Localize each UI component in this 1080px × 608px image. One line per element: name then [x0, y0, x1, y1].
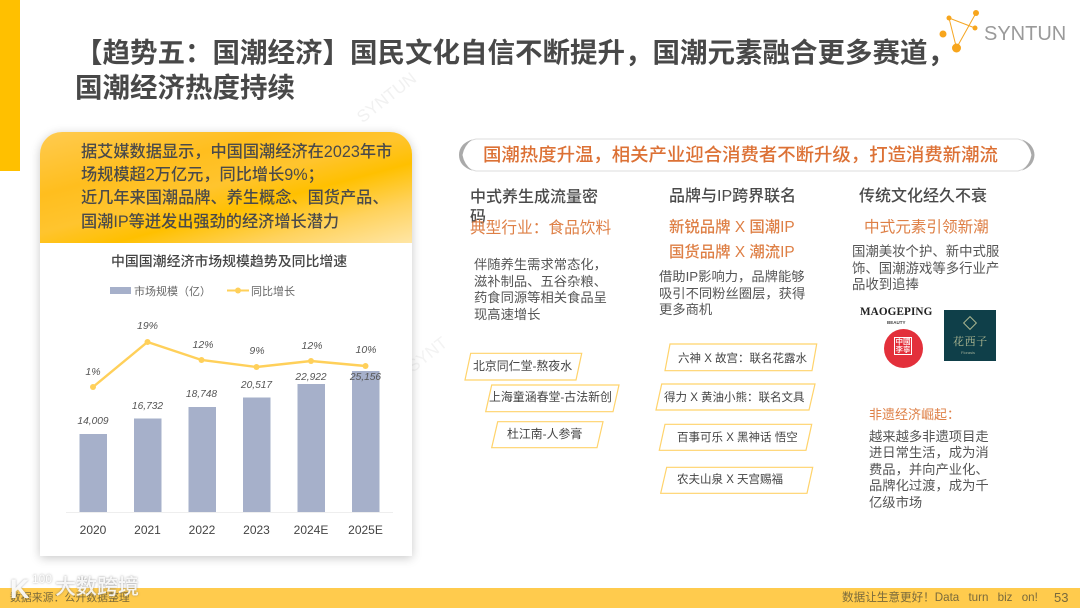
body text: 品牌化过渡，成为千 [869, 478, 989, 493]
brand logo: China Li-Ning [884, 329, 923, 368]
body text: 费品，并向产业化、 [869, 462, 989, 477]
heading: 码 [470, 209, 486, 226]
footer bar [0, 588, 1080, 608]
body text [659, 269, 805, 317]
axis labels [80, 523, 383, 537]
summary text: 近几年来国潮品牌、养生概念、国货产品、 [81, 189, 389, 207]
tag [659, 424, 812, 450]
watermark: publisher logo: K [10, 574, 30, 604]
tag: 六神 X 故宫：联名花露水 [678, 351, 808, 365]
brand logo: China Li-Ning: 李寧 [896, 345, 910, 354]
watermark: publisher logo: 100 [32, 572, 52, 586]
body text: 药食同源等相关食品呈 [474, 290, 607, 305]
subheadings [669, 218, 795, 261]
subheading: 中式元素引领新潮 [864, 219, 989, 236]
logo: SYNTUN [940, 10, 1066, 52]
yellow corner accent [0, 0, 20, 171]
chart title: 中国国潮经济市场规模趋势及同比增速 [111, 253, 347, 269]
heading: 中式养生成流量密 [470, 189, 598, 206]
legend: 同比增长 [251, 284, 295, 298]
growth labels: 10% [355, 344, 377, 356]
body text: 进日常生活，成为消 [869, 445, 989, 460]
legend [110, 284, 295, 298]
subheadings: 国货品牌 X 潮流IP [669, 244, 795, 261]
tag: 百事可乐 X 黑神话 悟空 [677, 430, 798, 444]
body text: 现高速增长 [474, 307, 540, 322]
growth labels: 9% [249, 345, 265, 357]
growth labels: 19% [137, 320, 158, 332]
axis labels: 2022 [189, 523, 216, 537]
axis labels: 2020 [80, 523, 107, 537]
summary text: 场规模超2万亿元，同比增长9%； [81, 166, 324, 184]
body text: 借助IP影响力，品牌能够 [659, 269, 805, 284]
logo: SYNTUN: SYNTUN [984, 23, 1066, 45]
subheading: 典型行业：食品饮料 [470, 220, 611, 237]
bar value labels [77, 372, 381, 427]
brand logo: China Li-Ning: 中國 [896, 337, 910, 346]
summary text [81, 142, 392, 231]
watermark lower: SYNT [404, 333, 451, 376]
brand logo: Florasis: Florasis [961, 350, 975, 355]
body text: 亿级市场 [869, 495, 922, 510]
tag: 得力 X 黄油小熊：联名文具 [664, 390, 805, 404]
brand logo: Florasis: 花西子 [953, 333, 988, 349]
tag [656, 384, 815, 410]
brand logo: Florasis [944, 310, 996, 361]
title: 国潮经济热度持续 [75, 72, 295, 103]
axis labels: 2025E [348, 523, 383, 537]
tag: 农夫山泉 X 天宫赐福 [677, 472, 783, 486]
title [75, 37, 955, 103]
heading: 传统文化经久不衰 [859, 188, 987, 205]
body text [474, 257, 607, 322]
subheading: intangible heritage: 非遗经济崛起： [869, 407, 960, 422]
growth labels: 12% [301, 340, 323, 352]
axis labels: 2024E [294, 523, 328, 537]
body text: 饰、国潮游戏等多行业产 [852, 260, 999, 276]
heading [470, 188, 598, 226]
tag [661, 467, 813, 493]
body text: 伴随养生需求常态化， [474, 257, 607, 272]
summary text: 国潮IP等迸发出强劲的经济增长潜力 [81, 213, 339, 231]
growth line [90, 339, 368, 390]
watermark: publisher logo [10, 572, 140, 604]
brand logo: MAOGEPING: MAOGEPING [860, 306, 932, 318]
growth labels: 12% [192, 339, 214, 351]
body text: 吸引不同粉丝圈层，获得 [659, 286, 805, 300]
bar value labels: 20,517 [240, 380, 272, 391]
watermark: publisher logo: 大数跨境 [55, 576, 139, 599]
heading: 品牌与IP跨界联名 [669, 188, 796, 205]
bar value labels: 16,732 [132, 401, 163, 412]
growth labels [85, 320, 377, 378]
summary text: 据艾媒数据显示，中国国潮经济在2023年市 [81, 143, 392, 161]
watermark: SYNTUN [353, 69, 420, 127]
legend: 市场规模（亿） [134, 284, 211, 298]
page number: 53 [1054, 590, 1068, 605]
axis labels: 2023 [243, 523, 270, 537]
body text: 更多商机 [659, 302, 712, 317]
body text [869, 429, 989, 510]
axis labels: 2021 [134, 523, 161, 537]
tag [492, 422, 603, 448]
bars [80, 371, 380, 512]
bar value labels: 25,156 [349, 372, 381, 383]
brand logo: BEAUTY tagline: BEAUTY [887, 320, 906, 325]
bar value labels: 22,922 [294, 372, 327, 383]
column 3: traditional culture [852, 187, 999, 510]
body text: 滋补制品、五谷杂粮、 [474, 274, 607, 289]
column 1: wellness [470, 188, 611, 322]
banner [459, 138, 1034, 172]
tag: 杜江南-人参膏 [507, 427, 582, 441]
growth labels: 1% [85, 366, 101, 378]
slogan: 数据让生意更好！Data turn biz on! [842, 591, 1038, 604]
tag: 北京同仁堂-熬夜水 [473, 359, 572, 373]
tag [665, 344, 817, 371]
body text [852, 244, 999, 292]
column 2: IP crossover [659, 187, 805, 317]
banner text: 国潮热度升温，相关产业迎合消费者不断升级，打造消费新潮流 [483, 144, 998, 165]
tag [486, 385, 619, 412]
tag [465, 353, 582, 380]
title: 【趋势五：国潮经济】国民文化自信不断提升，国潮元素融合更多赛道， [75, 37, 955, 68]
tag: 上海童涵春堂-古法新创 [489, 390, 612, 404]
bar value labels: 18,748 [186, 389, 217, 400]
bar value labels: 14,009 [77, 416, 109, 427]
summary header [40, 132, 412, 243]
panel: market data [40, 132, 412, 556]
body text: 国潮美妆个护、新中式服 [852, 244, 999, 259]
body text: 越来越多非遗项目走 [869, 429, 989, 444]
source note: 数据来源：公开数据整理 [10, 592, 130, 604]
body text: 品收到追捧 [852, 277, 919, 292]
subheadings: 新锐品牌 X 国潮IP [669, 219, 795, 236]
